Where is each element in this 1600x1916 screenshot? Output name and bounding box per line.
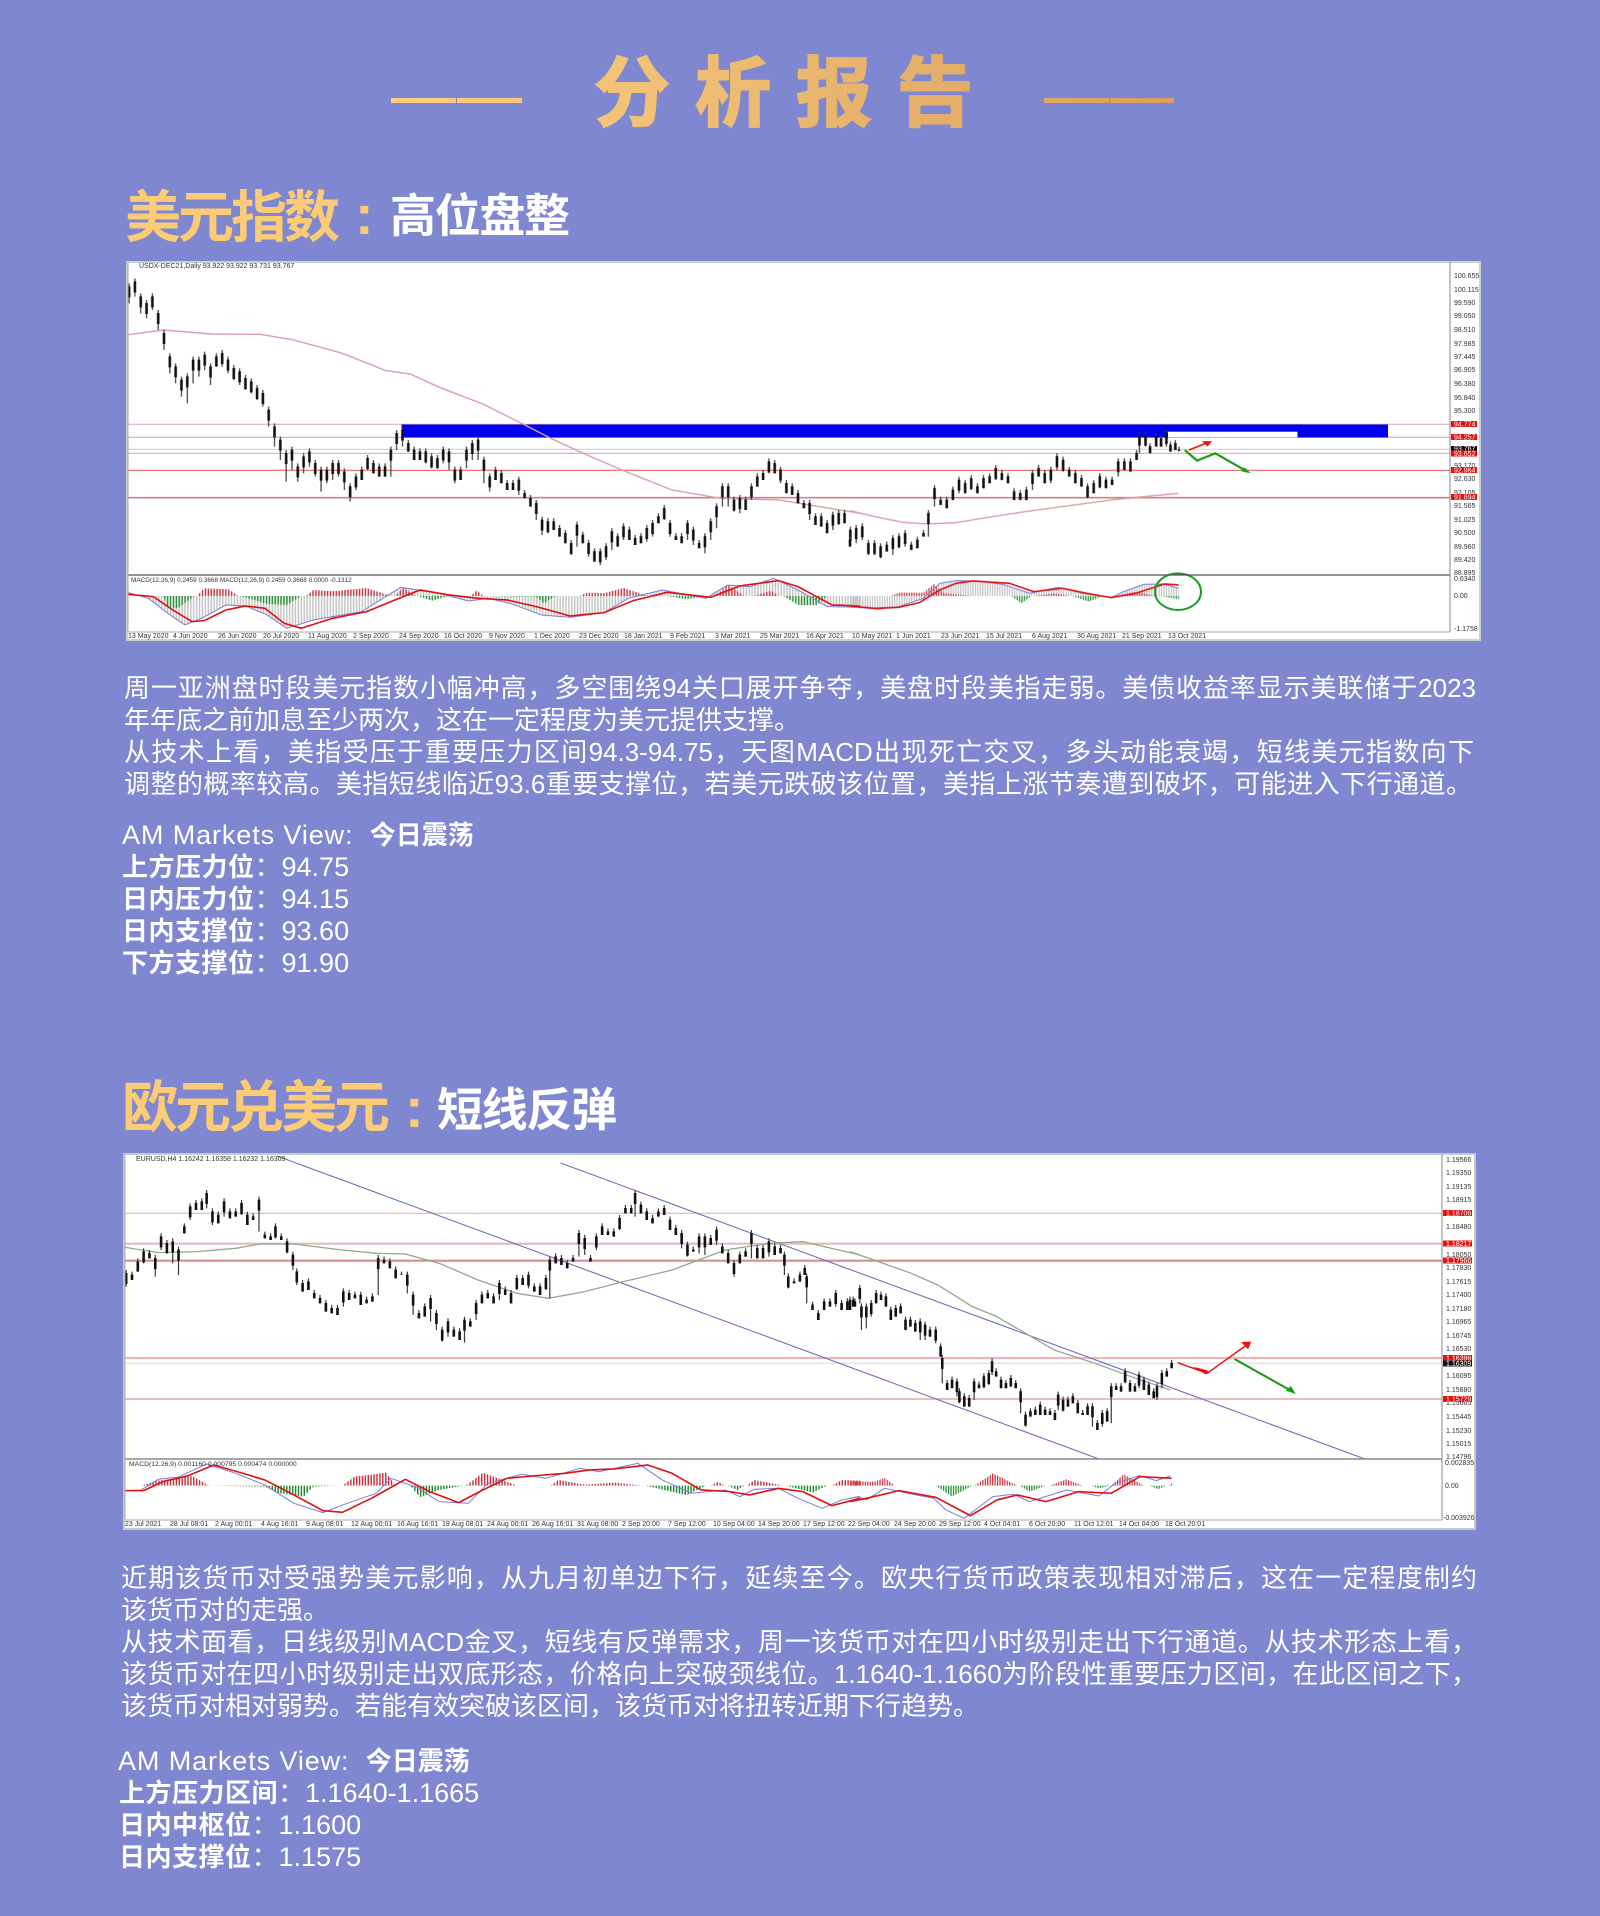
price axis labels: 1.19566 <box>1446 1157 1471 1164</box>
chart frame lines <box>128 262 1450 632</box>
price axis labels: 99.590 <box>1454 300 1476 307</box>
price axis labels: 1.15729 <box>1446 1396 1471 1404</box>
key levels: dollar index: 日内支撑位：93.60 <box>122 916 349 946</box>
date axis labels: 16 Apr 2021 <box>806 633 844 640</box>
price axis labels: 0.00 <box>1454 593 1468 600</box>
MACD header text: MACD(12,26,9) 0.2459 0.3668 MACD(12,26,9) 0.2459 0.3668 0.0000 -0.1312 <box>131 577 352 584</box>
date axis labels: 22 Sep 04:00 <box>848 1521 890 1528</box>
date axis labels: 30 Aug 2021 <box>1077 633 1116 640</box>
key levels: dollar index: 下方支撑位：91.90 <box>122 948 349 978</box>
price axis labels: 1.19350 <box>1446 1170 1471 1177</box>
price axis labels: 0.6340 <box>1454 576 1476 583</box>
key levels: EUR/USD: 日内支撑位：1.1575 <box>119 1842 361 1872</box>
price axis labels: 89.420 <box>1454 557 1476 564</box>
white gap in the resistance zone <box>1168 432 1298 437</box>
date axis labels: 6 Oct 20:00 <box>1029 1521 1065 1528</box>
price axis labels: 1.18217 <box>1446 1241 1471 1248</box>
price axis labels: 92.105 <box>1454 490 1476 497</box>
price axis labels: 1.16396 <box>1446 1356 1471 1362</box>
price axis labels: 100.655 <box>1454 273 1479 280</box>
text block: EUR/USD commentary: 该货币对相对弱势。若能有效突破该区间，该货币对将扭转近期下行趋势。 <box>121 1691 979 1721</box>
date axis labels: 13 May 2020 <box>128 633 169 640</box>
date axis labels: 31 Aug 08:00 <box>577 1521 618 1528</box>
price axis labels: 88.895 <box>1454 570 1476 577</box>
key levels: dollar index: 上方压力位：94.75 <box>122 852 349 882</box>
price axis labels: 1.16530 <box>1446 1346 1471 1353</box>
date axis labels: 24 Sep 20:00 <box>894 1521 936 1528</box>
price axis labels: 1.17400 <box>1446 1292 1471 1299</box>
date axis labels: 29 Sep 12:00 <box>939 1521 981 1528</box>
subheading: 高位盘整: 高位盘整 <box>390 190 569 242</box>
price axis labels: 1.15015 <box>1446 1441 1471 1448</box>
arrow: green down path <box>1185 450 1251 473</box>
price levels <box>125 1213 1442 1399</box>
date axis labels: 23 Jul 2021 <box>125 1521 161 1528</box>
price axis labels <box>1451 273 1479 633</box>
price axis labels: 1.19135 <box>1446 1184 1471 1191</box>
date axis labels: 14 Sep 20:00 <box>758 1521 800 1528</box>
chart: EURUSD H4 candlestick with MACD <box>123 1153 1476 1530</box>
date axis labels: 12 Aug 00:01 <box>351 1521 392 1528</box>
price axis labels: 97.445 <box>1454 354 1476 361</box>
text block: dollar index commentary: 调整的概率较高。美指短线临近93.6重要支撑位，若美元跌破该位置，美指上涨节奏遭到破坏，可能进入下行通道。 <box>124 769 1472 799</box>
price axis labels: 92.964 <box>1454 468 1476 474</box>
text block: EUR/USD commentary: 该货币对的走强。 <box>121 1595 329 1625</box>
date axis labels: 6 Aug 2021 <box>1032 633 1068 640</box>
date axis labels <box>125 1521 1205 1528</box>
price axis labels: 1.18706 <box>1446 1210 1471 1218</box>
price axis labels: 0.002835 <box>1445 1460 1474 1467</box>
price axis labels: 1.15665 <box>1446 1400 1471 1407</box>
date axis labels: 28 Jul 08:01 <box>170 1521 208 1528</box>
date axis labels: 18 Jan 2021 <box>624 633 663 640</box>
price axis labels: 96.380 <box>1454 381 1476 388</box>
date axis labels: 9 Aug 08:01 <box>306 1521 343 1528</box>
arrow: red up <box>1178 1342 1251 1375</box>
price axis labels: 1.16745 <box>1446 1333 1471 1340</box>
price axis labels: 91.894 <box>1454 494 1476 502</box>
price axis labels: 1.15880 <box>1446 1387 1471 1394</box>
date axis labels: 21 Sep 2021 <box>1122 633 1162 640</box>
date axis labels: 2 Sep 2020 <box>353 633 389 640</box>
chart header text: EURUSD,H4 1.16242 1.16358 1.16232 1.16309 <box>136 1156 286 1163</box>
arrow: red up <box>1189 441 1212 450</box>
price axis labels: 92.630 <box>1454 476 1476 483</box>
price axis labels: 0.00 <box>1445 1483 1459 1490</box>
text block: EUR/USD commentary <box>121 1563 1477 1721</box>
price axis labels: 91.565 <box>1454 503 1476 510</box>
price axis labels: 1.18915 <box>1446 1197 1471 1204</box>
price axis labels: 1.17966 <box>1446 1258 1471 1265</box>
price axis labels: 89.960 <box>1454 544 1476 551</box>
price axis labels: 95.300 <box>1454 408 1476 415</box>
price axis labels: 98.510 <box>1454 327 1476 334</box>
key levels: dollar index: 日内压力位：94.15 <box>122 884 349 914</box>
date axis labels <box>128 633 1206 640</box>
key levels: EUR/USD: AM Markets View: 今日震荡 <box>118 1746 470 1776</box>
text block: EUR/USD commentary: 近期该货币对受强势美元影响，从九月初单边下行，延续至今。欧央行货币政策表现相对滞后，这在一定程度制约 <box>121 1563 1477 1593</box>
price axis labels: 1.18050 <box>1446 1252 1471 1259</box>
panel: US dollar index section <box>122 183 1481 978</box>
trend channel lines <box>277 1156 1365 1459</box>
panel: EUR/USD section <box>118 1076 1477 1872</box>
title: 分析报告 with side bars <box>391 52 1174 137</box>
date axis labels: 19 Aug 08:01 <box>442 1521 483 1528</box>
price axis labels: -0.003926 <box>1443 1515 1475 1522</box>
date axis labels: 4 Jun 2020 <box>173 633 208 640</box>
date axis labels: 23 Dec 2020 <box>579 633 619 640</box>
resistance zone: blue band <box>402 424 1388 438</box>
date axis labels: 1 Dec 2020 <box>534 633 570 640</box>
date axis labels: 16 Aug 16:01 <box>397 1521 438 1528</box>
price axis labels: 94.257 <box>1454 434 1476 442</box>
price axis labels: 97.985 <box>1454 341 1476 348</box>
date axis labels: 2 Aug 00:01 <box>215 1521 252 1528</box>
date axis labels: 11 Oct 12:01 <box>1074 1521 1114 1528</box>
price axis labels: 90.500 <box>1454 530 1476 537</box>
date axis labels: 9 Nov 2020 <box>489 633 525 640</box>
date axis labels: 23 Jun 2021 <box>941 633 980 640</box>
price axis labels: 1.18480 <box>1446 1224 1471 1231</box>
title: 分析报告 with side bars: 分析报告 <box>594 52 998 137</box>
price axis labels: 1.16309 <box>1446 1361 1471 1368</box>
key levels: EUR/USD <box>118 1746 479 1872</box>
date axis labels: 4 Oct 04:01 <box>984 1521 1020 1528</box>
moving average, candles and MACD, right part <box>850 1252 1296 1518</box>
key levels: dollar index <box>122 820 474 978</box>
subheading: 短线反弹: 短线反弹 <box>437 1084 616 1136</box>
moving average, candles and MACD, left part <box>125 1190 860 1513</box>
price axis labels: 95.840 <box>1454 395 1476 402</box>
price levels <box>128 424 1450 498</box>
date axis labels: 10 Sep 04:00 <box>713 1521 755 1528</box>
date axis labels: 14 Oct 04:00 <box>1119 1521 1159 1528</box>
heading colon: : <box>405 1076 424 1139</box>
price axis labels: 1.17830 <box>1446 1265 1471 1272</box>
date axis labels: 4 Aug 16:01 <box>261 1521 298 1528</box>
key levels: EUR/USD: 日内中枢位：1.1600 <box>119 1810 361 1840</box>
price axis labels: 91.025 <box>1454 517 1476 524</box>
date axis labels: 18 Oct 20:01 <box>1165 1521 1205 1528</box>
date axis labels: 25 Mar 2021 <box>760 633 799 640</box>
date axis labels: 3 Mar 2021 <box>715 633 751 640</box>
text block: dollar index commentary: 周一亚洲盘时段美元指数小幅冲高，多空围绕94关口展开争夺，美盘时段美指走弱。美债收益率显示美联储于2023 <box>124 673 1476 703</box>
date axis labels: 26 Jun 2020 <box>218 633 257 640</box>
date axis labels: 9 Feb 2021 <box>670 633 706 640</box>
text block: dollar index commentary: 从技术上看，美指受压于重要压力区间94.3-94.75，天图MACD出现死亡交叉，多头动能衰竭，短线美元指数向下 <box>124 737 1474 767</box>
date axis labels: 16 Oct 2020 <box>444 633 482 640</box>
arrow: green down <box>1235 1359 1296 1394</box>
date axis labels: 1 Jun 2021 <box>896 633 931 640</box>
heading colon: : <box>355 183 374 246</box>
text block: dollar index commentary: 年年底之前加息至少两次，这在一定程度为美元提供支撑。 <box>124 705 800 735</box>
date axis labels: 10 May 2021 <box>852 633 893 640</box>
price axis labels: 94.774 <box>1454 422 1476 428</box>
price axis labels: 99.050 <box>1454 313 1476 320</box>
text block: dollar index commentary <box>124 673 1476 799</box>
chart header text: USDX-DEC21,Daily 93.922 93.922 93.731 93.767 <box>139 263 294 270</box>
date axis labels: 20 Jul 2020 <box>263 633 299 640</box>
price axis labels: 1.15445 <box>1446 1414 1471 1421</box>
moving average, candles and MACD, right part <box>850 430 1251 609</box>
date axis labels: 15 Jul 2021 <box>986 633 1022 640</box>
price axis labels: -1.1758 <box>1454 626 1478 633</box>
key levels: dollar index: AM Markets View: 今日震荡 <box>122 820 474 850</box>
MACD header text: MACD(12,26,9) 0.001160 0.000795 0.000474 0.000000 <box>129 1461 297 1468</box>
price axis labels: 1.14796 <box>1446 1454 1471 1461</box>
key levels: EUR/USD: 上方压力区间：1.1640-1.1665 <box>119 1778 479 1808</box>
moving average curve, left part <box>128 278 860 628</box>
price axis labels: 93.170 <box>1454 463 1476 470</box>
price axis labels <box>1443 1157 1475 1522</box>
date axis labels: 13 Oct 2021 <box>1168 633 1206 640</box>
price axis labels: 96.905 <box>1454 367 1476 374</box>
date axis labels: 2 Sep 20:00 <box>622 1521 660 1528</box>
date axis labels: 7 Sep 12:00 <box>668 1521 706 1528</box>
price axis labels: 93.652 <box>1454 451 1476 458</box>
price axis labels: 1.15230 <box>1446 1428 1471 1435</box>
price axis labels: 1.16095 <box>1446 1373 1471 1380</box>
date axis labels: 17 Sep 12:00 <box>803 1521 845 1528</box>
heading: 欧元兑美元: 欧元兑美元 <box>122 1076 387 1139</box>
chart: USDX daily candlestick with MACD <box>126 261 1481 641</box>
date axis labels: 24 Sep 2020 <box>399 633 439 640</box>
text block: EUR/USD commentary: 从技术面看，日线级别MACD金叉，短线有反弹需求，周一该货币对在四小时级别走出下行通道。从技术形态上看， <box>121 1627 1477 1657</box>
heading: 美元指数: 美元指数 <box>125 186 337 249</box>
MACD highlight circle <box>1155 573 1201 610</box>
date axis labels: 26 Aug 16:01 <box>532 1521 573 1528</box>
chart frame lines <box>125 1154 1442 1520</box>
price axis labels: 100.115 <box>1454 287 1479 294</box>
price axis labels: 1.17615 <box>1446 1279 1471 1286</box>
text block: EUR/USD commentary: 该货币对在四小时级别走出双底形态，价格向上突破颈线位。1.1640-1.1660为阶段性重要压力区间，在此区间之下， <box>121 1659 1477 1689</box>
date axis labels: 24 Aug 00:01 <box>487 1521 528 1528</box>
price axis labels: 1.16965 <box>1446 1319 1471 1326</box>
price axis labels: 93.767 <box>1454 446 1476 453</box>
date axis labels: 11 Aug 2020 <box>308 633 347 640</box>
price axis labels: 1.17180 <box>1446 1306 1471 1313</box>
